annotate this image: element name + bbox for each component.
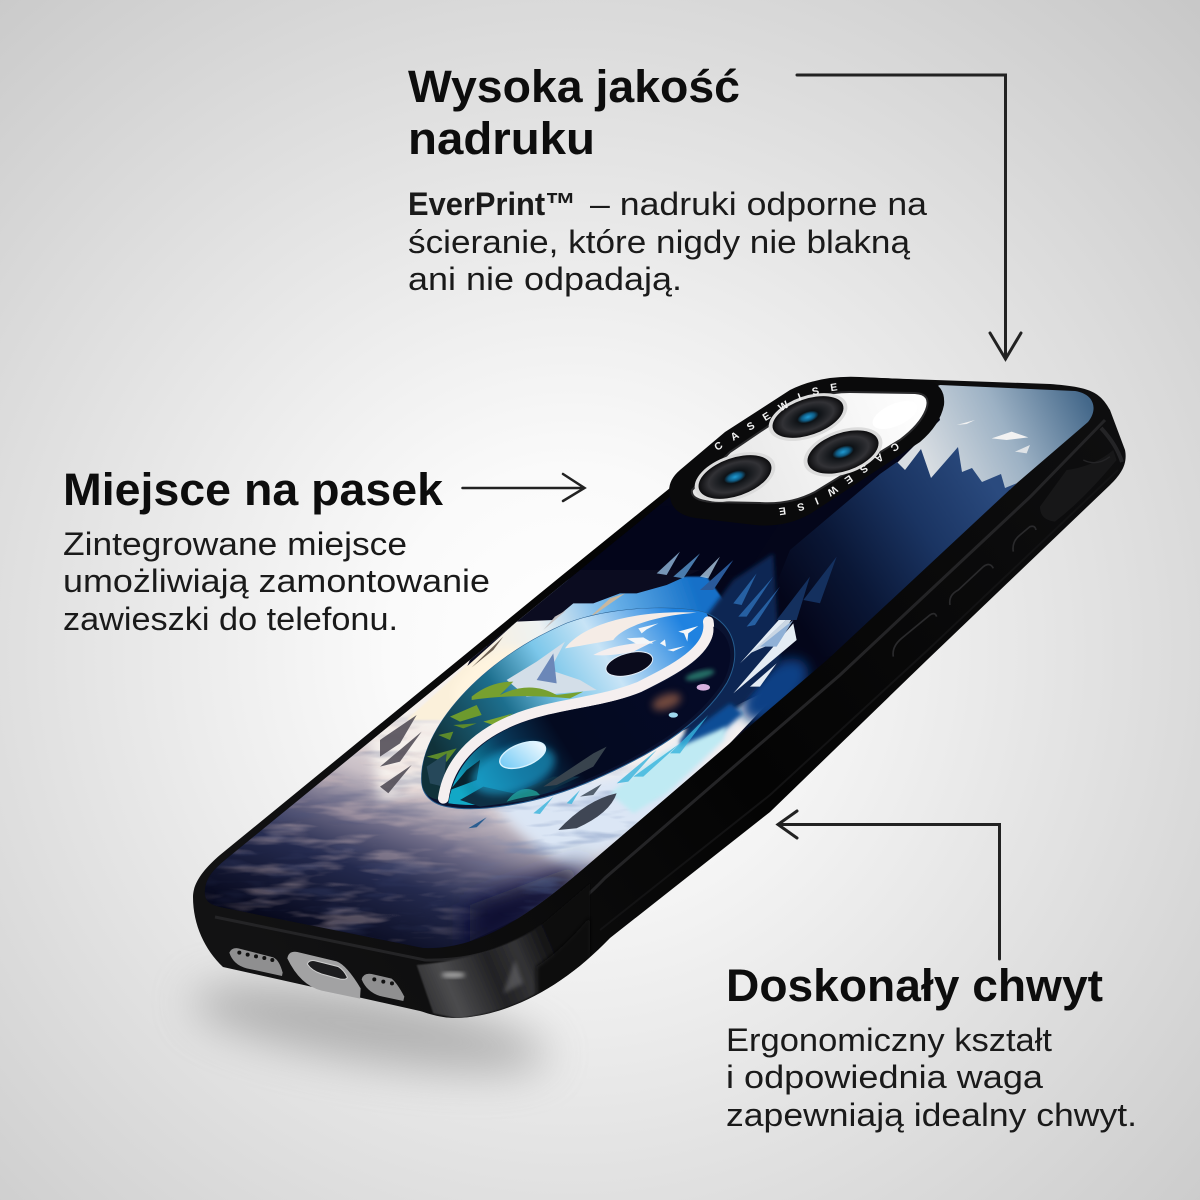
callout: print quality: nadruku [408,113,595,164]
rocks at left [380,715,422,793]
left speaker [229,948,283,976]
ice below disc [533,715,727,814]
callout: grip [726,960,1137,1133]
disc rim [422,608,735,809]
teal islands [460,777,580,807]
side buttons [893,450,1117,657]
corner gloss [417,883,590,1018]
callout: print quality: ani nie odpadają. [408,261,682,297]
night blue right [680,553,780,757]
callout: print quality: – nadruki odporne na [590,186,927,222]
lens left [688,443,782,511]
sky [898,385,1094,490]
usb-c port [287,952,361,999]
callout: strap slot [63,464,490,637]
sun sky [407,577,733,720]
camera window [692,392,928,503]
cloud wave [785,447,1017,652]
camera island [669,376,944,526]
island ring [669,377,944,526]
upper cloud band [565,612,697,648]
lens top [762,384,854,450]
brand text top: CASEWISE [714,383,838,450]
green land [472,682,583,700]
body text: Ergonomiczny kształt [726,1022,1052,1058]
dark sky spikes [467,576,687,667]
callout: grip: i odpowiednia waga [726,1059,1043,1095]
light cloud s-curve [443,622,709,798]
callout: print quality [408,61,927,297]
bottom ports [229,948,404,1001]
body text: EverPrint™ [408,186,576,222]
dark half [448,627,730,805]
body text: Zintegrowane miejsce [63,526,407,562]
nebula [650,690,683,714]
heading: Doskonały chwyt [726,960,1103,1011]
callout: strap slot: umożliwiają zamontowanie [63,563,490,599]
callout: strap slot: zawieszki do telefonu. [63,601,398,637]
lower clouds [206,646,761,948]
streaks above cloud wave [700,420,1030,653]
printed artwork [205,385,1094,948]
sky clouds [957,420,975,425]
black eye [606,651,654,677]
phone shadow [187,966,553,1090]
heading: Miejsce na pasek [63,464,444,515]
brand text bottom: CASEWISE [778,444,899,516]
case body [193,377,1126,1018]
birds [627,623,698,651]
yin-yang [422,608,735,809]
arrow: strap slot [462,474,584,501]
artwork detail in 3x coordinates [380,497,797,830]
phone case [193,376,1126,1018]
right speaker [362,974,404,1001]
callout: grip: zapewniają idealny chwyt. [726,1097,1137,1133]
arrow: print quality [797,75,1021,359]
cloud textures [205,716,638,942]
callout: print quality: ścieranie, które nigdy nie blakną [408,224,910,260]
white eye [467,740,560,800]
light half [422,608,710,800]
arrow: grip [778,811,1000,959]
lens right [797,418,889,486]
mountains [507,642,597,697]
side wall details [215,420,1122,1018]
rock in clouds [558,793,617,830]
streaks [734,620,797,694]
heading: Wysoka jakość [408,61,740,112]
night above [480,497,797,640]
